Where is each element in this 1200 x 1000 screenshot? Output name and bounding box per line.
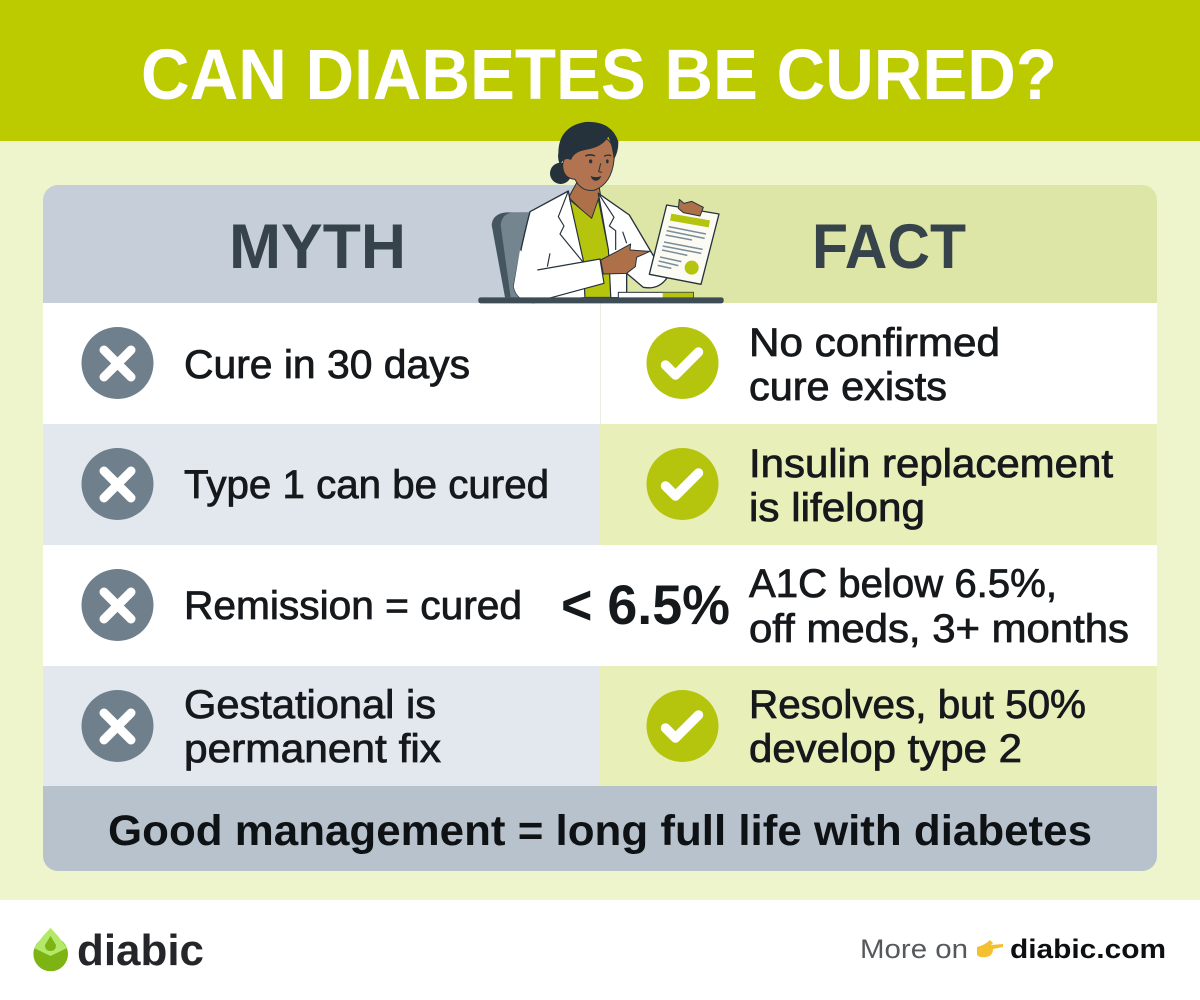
logo icon: droplet: [33, 928, 68, 971]
myth text: cure in 30 days: Cure in 30 days: [184, 343, 470, 387]
fact icon: check: [646, 327, 718, 399]
myth text: gestational: Gestational is: [184, 683, 436, 727]
page background: [0, 141, 1200, 900]
myth icon: cross: [82, 690, 154, 762]
head: [563, 133, 614, 190]
myth icon: cross: [82, 448, 154, 520]
title banner: [0, 0, 1200, 141]
summary bar: [43, 786, 1157, 871]
panel: myth vs fact table: [43, 185, 1157, 871]
footer: [0, 900, 1200, 1000]
myth column header: [43, 185, 600, 303]
A1C threshold value: < 6.5%: [561, 573, 730, 636]
bun: [550, 163, 571, 184]
fact text: resolves: Resolves, but 50%: [749, 683, 1086, 727]
fact text: resolves: [749, 683, 1086, 771]
fact text: A1C remission criteria: off meds, 3+ months: [749, 607, 1129, 651]
myth column header: MYTH: [229, 212, 406, 282]
coat lapels: [533, 191, 627, 303]
fact text: insulin replacement: Insulin replacement: [749, 442, 1113, 486]
pointing hand: [601, 244, 650, 274]
document: [649, 205, 719, 284]
fact text: insulin replacement: [749, 442, 1113, 530]
myth text: type 1 can be cured: Type 1 can be cured: [184, 463, 549, 507]
neck: [569, 182, 601, 220]
chair: [492, 212, 530, 297]
lab coat: [514, 191, 667, 303]
more on link text: More on: [860, 934, 968, 964]
summary bar: Good management = long full life with diabetes: [108, 807, 1092, 855]
fact column header: [600, 185, 1157, 303]
hair: [558, 122, 618, 165]
myth icon: cross: [82, 569, 154, 641]
sleeve: [514, 250, 604, 303]
logo: diabic: [33, 926, 204, 975]
title: CAN DIABETES BE CURED?: [141, 36, 1057, 115]
fact text: no confirmed cure: cure exists: [749, 365, 947, 409]
more on link text: diabic.com: [1010, 934, 1166, 964]
fact text: resolves: develop type 2: [749, 727, 1022, 771]
myth text: gestational: permanent fix: [184, 727, 441, 771]
myth text: gestational: [184, 683, 441, 771]
logo wordmark: diabic: [77, 926, 204, 975]
desk items: [618, 292, 693, 298]
fact text: insulin replacement: is lifelong: [749, 486, 925, 530]
more on link text: [860, 934, 1166, 964]
icon: pointing hand: [977, 940, 1003, 957]
fact icon: check: [646, 448, 718, 520]
row 3: [43, 545, 1157, 666]
fact text: no confirmed cure: No confirmed: [749, 321, 1000, 365]
fact column header: FACT: [812, 212, 966, 282]
row 4: [43, 666, 1157, 786]
illustration: doctor holding document: [478, 122, 724, 303]
myth text: remission equals cured: Remission = cured: [184, 584, 522, 628]
desk: [478, 297, 724, 303]
row 2: [43, 424, 1157, 545]
fact text: no confirmed cure: [750, 326, 998, 401]
fact text: A1C remission criteria: A1C below 6.5%,: [749, 562, 1057, 606]
row 1: [43, 303, 1157, 424]
myth icon: cross: [82, 327, 154, 399]
scrubs: [570, 199, 611, 297]
fact text: A1C remission criteria: [748, 568, 1128, 648]
fact icon: check: [646, 690, 718, 762]
face: [585, 154, 611, 181]
holding hand: [678, 199, 703, 216]
